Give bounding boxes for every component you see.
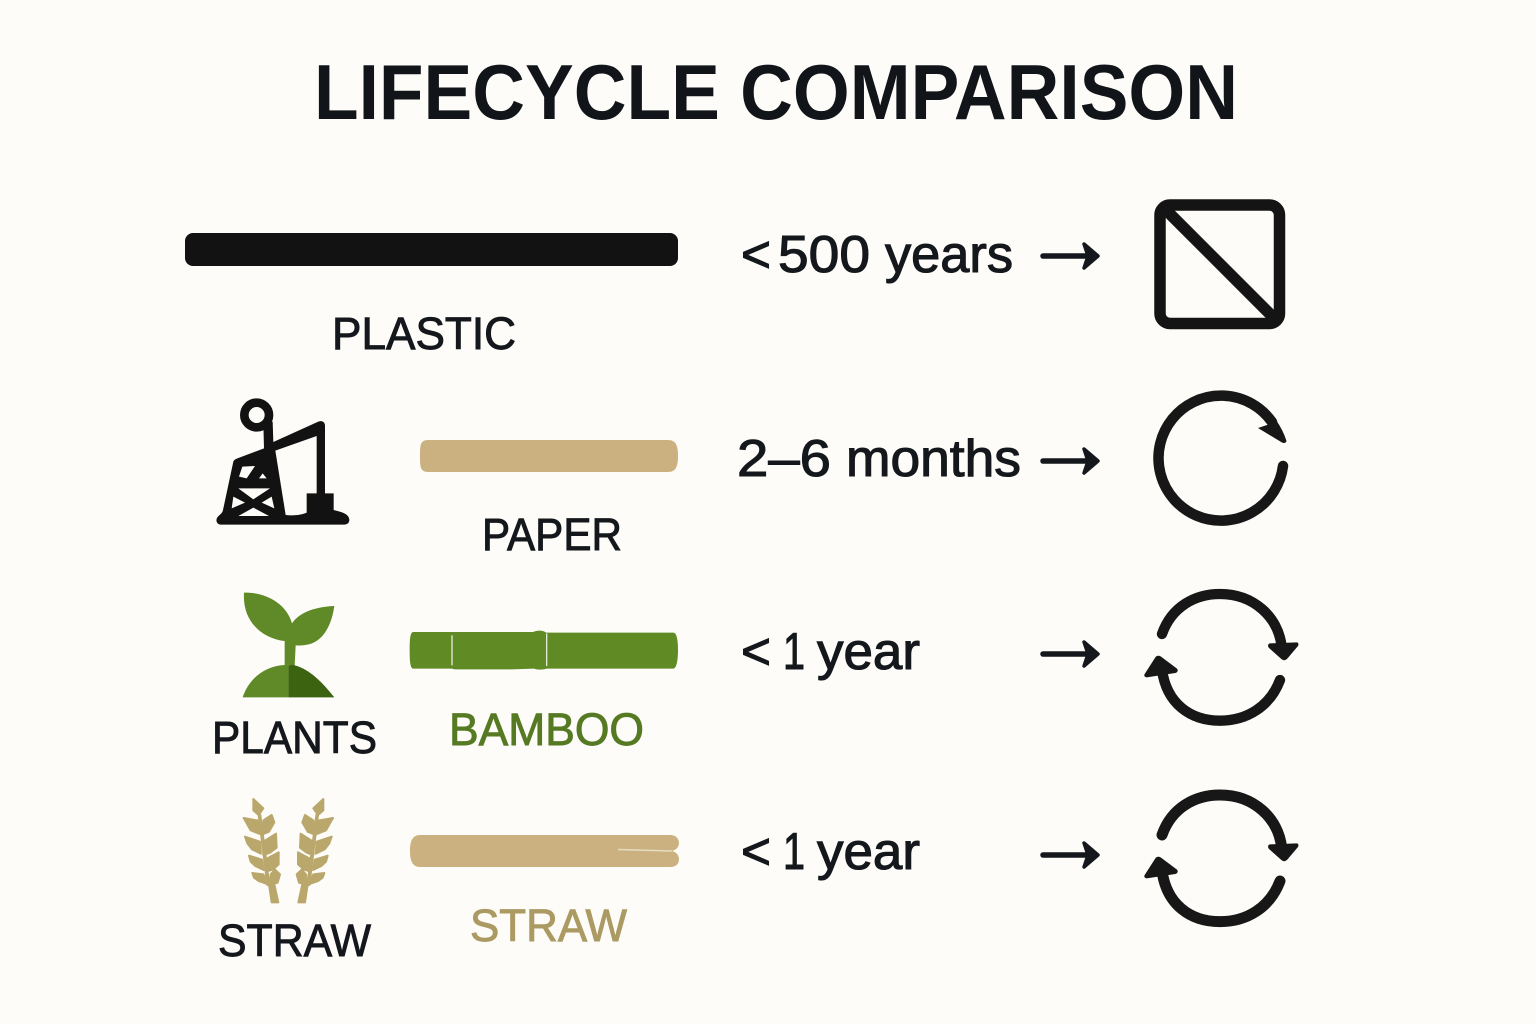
duration: 500 years: < bbox=[741, 226, 771, 284]
duration: 1 year: year bbox=[817, 823, 920, 881]
row: plastic bbox=[185, 205, 1280, 359]
title: LIFECYCLE COMPARISON bbox=[314, 48, 1238, 136]
row: paper bbox=[216, 396, 1286, 560]
duration: 500 years: 500 bbox=[778, 226, 870, 284]
duration: 1 year: < bbox=[741, 623, 771, 681]
label: plastic: PLASTIC bbox=[332, 308, 516, 359]
duration: 2-6 months: months bbox=[846, 430, 1021, 488]
icon: single cycle arrow bbox=[1158, 396, 1286, 521]
bamboo straw bar bbox=[410, 631, 678, 670]
row: bamboo bbox=[212, 593, 1298, 763]
label: bamboo: BAMBOO bbox=[449, 704, 644, 755]
icon: crossed-out square bbox=[1160, 205, 1280, 324]
row: straw bbox=[218, 795, 1298, 966]
duration: 500 years: years bbox=[885, 226, 1013, 284]
arrow bbox=[1043, 449, 1098, 473]
duration: 1 year: year bbox=[817, 623, 920, 681]
label: straw (material): STRAW bbox=[470, 900, 628, 951]
plastic straw bar bbox=[185, 233, 678, 266]
label: paper: PAPER bbox=[482, 509, 622, 560]
duration: 1 year: 1 bbox=[783, 623, 805, 681]
straw bar bbox=[410, 835, 679, 867]
arrow bbox=[1043, 244, 1098, 268]
icon: double cycle arrows bbox=[1144, 594, 1298, 721]
paper straw bar bbox=[420, 440, 678, 472]
arrow bbox=[1043, 642, 1098, 666]
label: straw (source): STRAW bbox=[218, 915, 371, 966]
duration: 1 year: < bbox=[741, 823, 771, 881]
icon: double cycle arrows bbox=[1144, 795, 1298, 922]
label: plants: PLANTS bbox=[212, 712, 377, 763]
icon: sprout bbox=[243, 593, 334, 697]
duration: 2-6 months: 2–6 bbox=[737, 430, 831, 488]
icon: wheat bbox=[244, 799, 333, 902]
icon: oil pump bbox=[216, 403, 349, 525]
duration: 1 year: 1 bbox=[783, 823, 805, 881]
arrow bbox=[1043, 843, 1098, 867]
